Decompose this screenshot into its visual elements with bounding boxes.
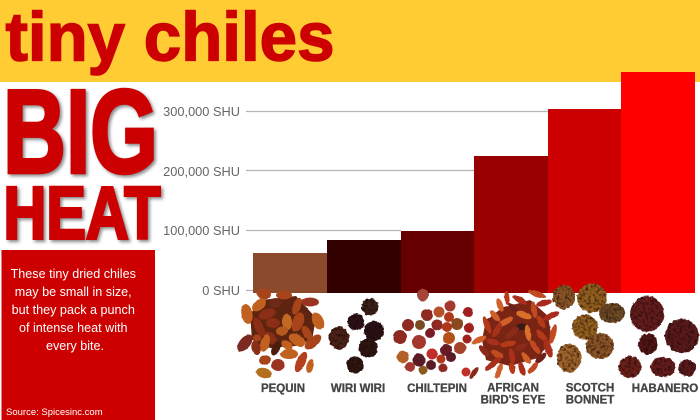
panel: description: These tiny dried chiles [11, 267, 136, 281]
chile labels: AFRICAN [487, 382, 539, 394]
title banner [0, 0, 700, 82]
chile labels: WIRI WIRI [331, 383, 385, 395]
y axis labels and grid lines: 300,000 SHU [163, 104, 240, 119]
heading: HEAT: HEAT [4, 172, 160, 254]
chile labels: CHILTEPIN [407, 383, 467, 395]
panel: description: every bite. [46, 339, 104, 353]
icon: wiri wiri chiles [329, 298, 384, 374]
y axis labels and grid lines: 100,000 SHU [163, 223, 240, 238]
chile labels: BONNET [566, 394, 614, 406]
chile labels [261, 382, 698, 406]
icon: chiltepin chiles [393, 289, 474, 376]
icon: pequin chiles [234, 288, 327, 380]
panel: description [2, 250, 155, 420]
chile labels: SCOTCH [566, 382, 614, 394]
panel: description: but they pack a punch [12, 303, 135, 317]
bar: Scotch Bonnet [548, 109, 621, 293]
panel: description: of intense heat with [19, 321, 128, 335]
panel: description: may be small in size, [15, 285, 132, 299]
icon: african bird's eye chiles [468, 288, 560, 380]
bar chart: Scoville heat [163, 72, 695, 298]
chile labels: BIRD'S EYE [481, 394, 546, 406]
icon: scotch bonnet chiles [552, 284, 625, 372]
chile labels: PEQUIN [261, 383, 305, 395]
icon: habanero chiles [618, 296, 700, 378]
y axis labels and grid lines: 200,000 SHU [163, 164, 240, 179]
title banner: tiny chiles [6, 0, 334, 76]
panel: description: Source: Spicesinc.com [6, 407, 103, 418]
bar: Habanero [621, 72, 695, 293]
chile labels: HABANERO [632, 383, 698, 395]
bar: Chiltepin [401, 231, 474, 293]
heading: BIG: BIG [3, 66, 158, 198]
y axis labels and grid lines: 0 SHU [202, 283, 240, 298]
bar: Pequin [253, 253, 327, 293]
bar: African Bird's Eye [474, 156, 548, 293]
bar: Wiri Wiri [327, 240, 401, 293]
y axis labels and grid lines [163, 104, 548, 298]
